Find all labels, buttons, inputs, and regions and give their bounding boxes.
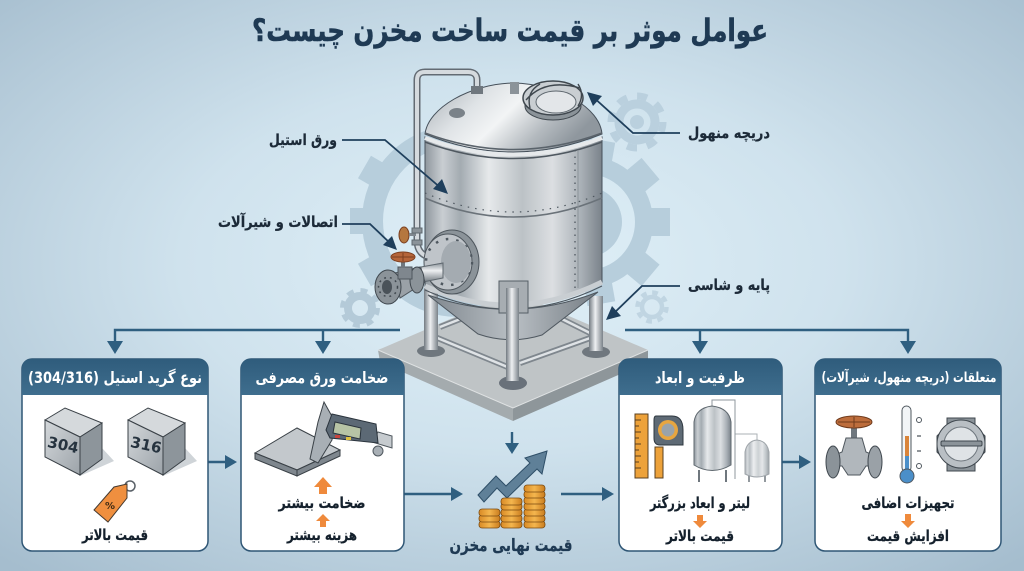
icon: cube 316: 316 [129,433,163,457]
label: fittings and valves: اتصالات و شیرآلات [218,213,338,231]
panel header [22,359,208,395]
label: steel sheet [269,131,448,194]
orange arrow [314,477,332,494]
arrows between panels [208,432,811,501]
vent pipe [417,72,477,256]
icon: rising arrow [478,451,547,502]
panel caption: لیتر و ابعاد بزرگتر [649,494,750,512]
icon: cube 316 [128,408,197,476]
panel heading: ظرفیت و ابعاد [655,368,745,387]
panel: sheet thickness [241,359,404,551]
panel caption: ضخامت بیشتر [278,494,366,512]
manway hatch [523,81,583,120]
tank body [425,137,602,305]
panel caption: افزایش قیمت [867,527,949,545]
front leg [499,281,528,390]
tank dome [425,83,602,152]
panel heading: ضخامت ورق مصرفی [256,368,388,387]
tank seams [425,133,602,309]
panel header [241,359,404,395]
flow connectors from tank to panels [107,330,916,354]
icon: gate valve [826,416,882,478]
tank [375,72,610,390]
label: base and chassis [606,276,770,320]
label: steel sheet: ورق استیل [269,131,337,149]
panel heading: نوع گرید استیل (304/316) [28,368,202,387]
icon: price tag: % [105,501,115,512]
icon: small tank [735,434,769,482]
icon: manway cover [937,418,985,471]
panel caption: قیمت بالاتر [665,527,734,545]
panel caption: هزینه بیشتر [286,526,357,544]
label: base and chassis: پایه و شاسی [688,276,770,295]
panel caption: قیمت بالاتر [81,526,148,544]
icon: coin stacks [479,485,545,528]
background gears [342,96,670,326]
label: manway hatch: دریچه منهول [688,124,770,143]
panel header [619,359,782,395]
icon: cube 304 [45,408,114,476]
icon: large tank [694,400,735,482]
panel header [815,359,1001,395]
panel: capacity and dimensions [619,359,782,551]
orange arrow [693,515,707,528]
panel caption: تجهیزات اضافی [862,494,954,512]
label: manway hatch [587,92,770,143]
top fittings [449,82,519,118]
orange arrow [316,514,330,527]
tank cone bottom [428,292,598,340]
panel: steel grade [22,359,208,551]
final price [450,451,572,556]
title: عوامل موثر بر قیمت ساخت مخزن چیست؟ [252,13,768,49]
orange arrow [901,514,915,528]
final price label: قیمت نهایی مخزن [450,536,572,556]
concrete base slab [378,292,648,421]
label: fittings and valves [218,213,397,250]
icon: thermometer [900,406,922,483]
icon: tape measure [654,416,683,478]
tank stand [417,288,610,368]
icon: ruler [635,414,648,478]
icon: sheet and caliper [255,402,392,476]
side flange [424,230,479,294]
panel: accessories [815,359,1001,551]
icon: price tag [94,481,135,522]
icon: cube 304: 304 [46,433,80,457]
valve and pipework [375,227,443,304]
